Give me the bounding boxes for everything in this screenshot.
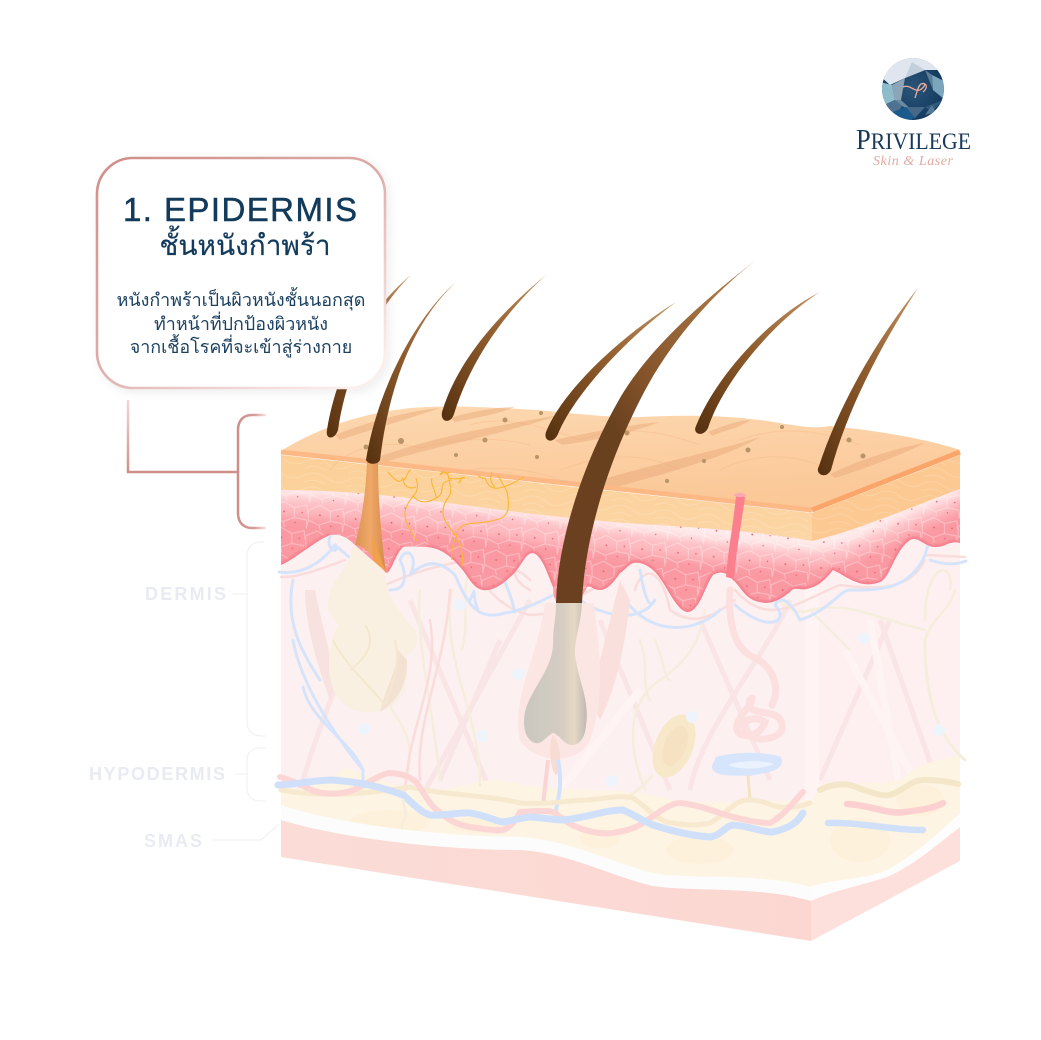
stratum corneum layer [281, 455, 960, 541]
yellow sensory nerves [388, 470, 524, 566]
logo [856, 54, 971, 169]
right side blue vessel [828, 823, 923, 830]
smas label: SMAS [144, 831, 202, 851]
logo diamond emblem [882, 58, 944, 120]
surface folds [330, 421, 860, 480]
sweat duct opening [734, 493, 746, 497]
card title: 1. EPIDERMIS [123, 191, 357, 228]
logo script P [903, 83, 926, 98]
sweat gland coil [730, 590, 782, 739]
logo wordmark: PRIVILEGE [856, 125, 971, 156]
nerve band [281, 787, 810, 825]
dermis label: DERMIS [145, 584, 226, 604]
hair 1, partly behind card [327, 275, 411, 438]
hair 7 [818, 288, 918, 475]
right side red vessel [847, 803, 943, 813]
pale red vessels upper [281, 555, 965, 790]
smas label [144, 824, 279, 851]
hair strands [327, 260, 918, 603]
hair 2 [366, 282, 456, 464]
blue sensory corpuscle [712, 753, 782, 800]
skin cross-section block [270, 260, 970, 941]
epidermis bracket [238, 415, 266, 528]
living epidermis: pink cell layer [281, 489, 960, 612]
card body text [117, 287, 365, 358]
skin surface [281, 406, 960, 510]
connector: card to bracket [128, 400, 238, 472]
hair shadows and creases [335, 407, 925, 490]
hair 6 [695, 292, 820, 434]
red vessel [280, 773, 803, 833]
pale nerves [385, 560, 965, 800]
pores [364, 411, 866, 483]
muscle behind gland [305, 590, 333, 700]
collagen fibres [298, 599, 932, 791]
card body text: ทำหน้าที่ปกป้องผิวหนัง [154, 311, 328, 334]
sweat duct [726, 495, 745, 579]
right side nerve [820, 780, 958, 795]
arrector muscle [590, 580, 630, 720]
blue vessel [278, 780, 803, 837]
hair 3 [442, 275, 546, 421]
hypodermis label [89, 748, 266, 801]
big hair [556, 260, 756, 603]
dermis layer [281, 494, 960, 802]
right edge band [812, 452, 960, 510]
smas layer: white band and pink base [281, 805, 960, 941]
white dermal cells [358, 599, 945, 787]
card Thai heading: ชั้นหนังกำพร้า [159, 225, 331, 261]
hair root sheath [355, 462, 387, 573]
hypodermis label: HYPODERMIS [89, 764, 225, 784]
dermis label [145, 542, 266, 736]
logo tagline: Skin & Laser [873, 154, 954, 169]
tan oval gland [625, 708, 704, 800]
pale blue vessels upper [279, 537, 966, 783]
callout card [97, 158, 385, 388]
sebaceous gland [328, 546, 417, 712]
lower vessels and nerve bands [278, 773, 958, 837]
card body text: จากเชื้อโรคที่จะเข้าสู่ร่างกาย [130, 334, 352, 358]
card body text: หนังกำพร้าเป็นผิวหนังชั้นนอกสุด [117, 287, 365, 311]
hair follicle bulb [518, 603, 600, 815]
subcutaneous fat layer [281, 755, 960, 890]
dermal vessels and nerves [279, 537, 966, 800]
hair 4 [545, 302, 676, 441]
card background [97, 158, 385, 388]
front edge band [281, 452, 812, 510]
